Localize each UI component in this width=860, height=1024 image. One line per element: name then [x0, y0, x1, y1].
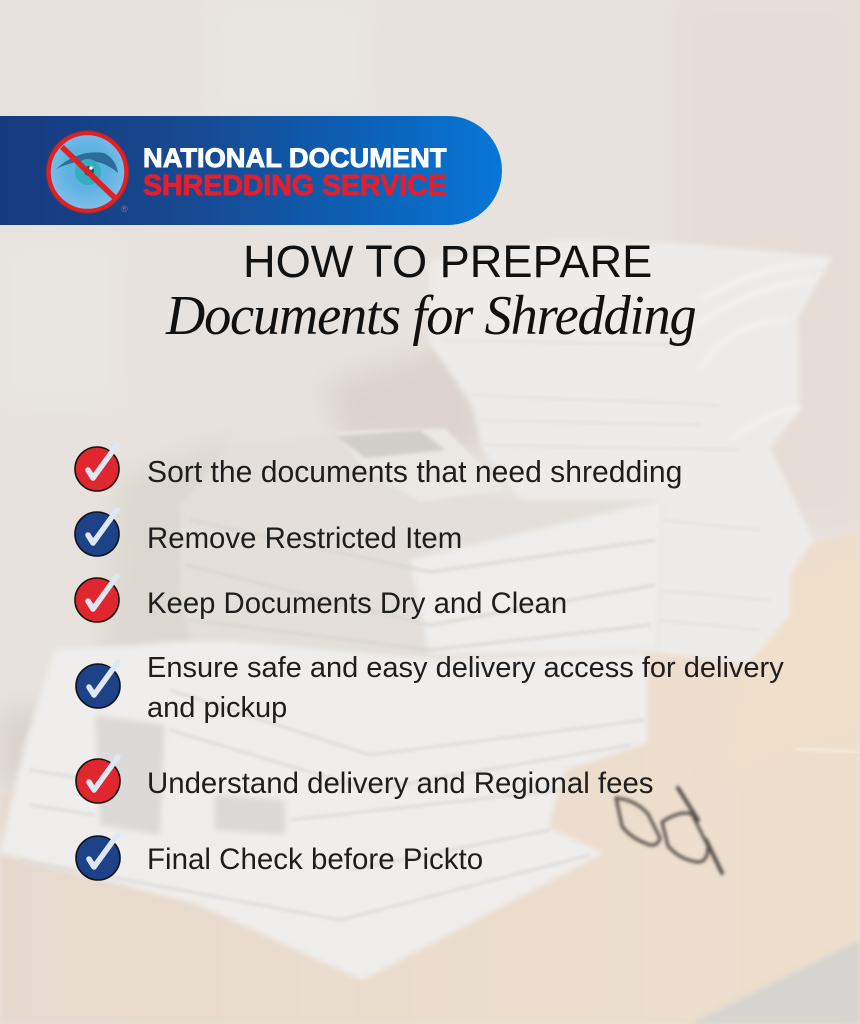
registered mark: ®	[121, 204, 128, 214]
logo text: SHREDDING SERVICE	[143, 170, 447, 202]
logo text: NATIONAL DOCUMENT	[143, 143, 446, 173]
desk	[0, 530, 860, 1024]
title	[165, 236, 696, 347]
glasses	[616, 788, 722, 873]
item 4	[147, 652, 784, 724]
item 4: Ensure safe and easy delivery access for delivery	[147, 652, 784, 684]
check icon 6	[75, 832, 121, 881]
check icon 3	[74, 573, 120, 623]
title: HOW TO PREPARE	[243, 236, 652, 287]
item 5: Understand delivery and Regional fees	[147, 767, 654, 800]
logo text	[143, 143, 447, 202]
logo banner	[0, 116, 502, 225]
title: Documents for Shredding	[166, 285, 695, 347]
item 3: Keep Documents Dry and Clean	[147, 587, 567, 620]
item 2: Remove Restricted Item	[147, 522, 462, 555]
check icon 4	[75, 660, 121, 709]
check icon 1	[74, 442, 120, 492]
item 1: Sort the documents that need shredding	[147, 456, 682, 489]
checklist	[74, 442, 784, 881]
icon: crossed-out eye logo	[46, 130, 130, 214]
check icon 5	[75, 754, 121, 804]
shadow gaps in front stack	[95, 715, 165, 835]
back stack	[430, 240, 832, 665]
item 6: Final Check before Pickto	[147, 843, 483, 876]
middle stack	[180, 436, 662, 660]
item 4: and pickup	[147, 692, 287, 724]
shadows behind stacks	[325, 340, 485, 450]
front stack	[0, 640, 647, 980]
check icon 2	[74, 507, 120, 557]
